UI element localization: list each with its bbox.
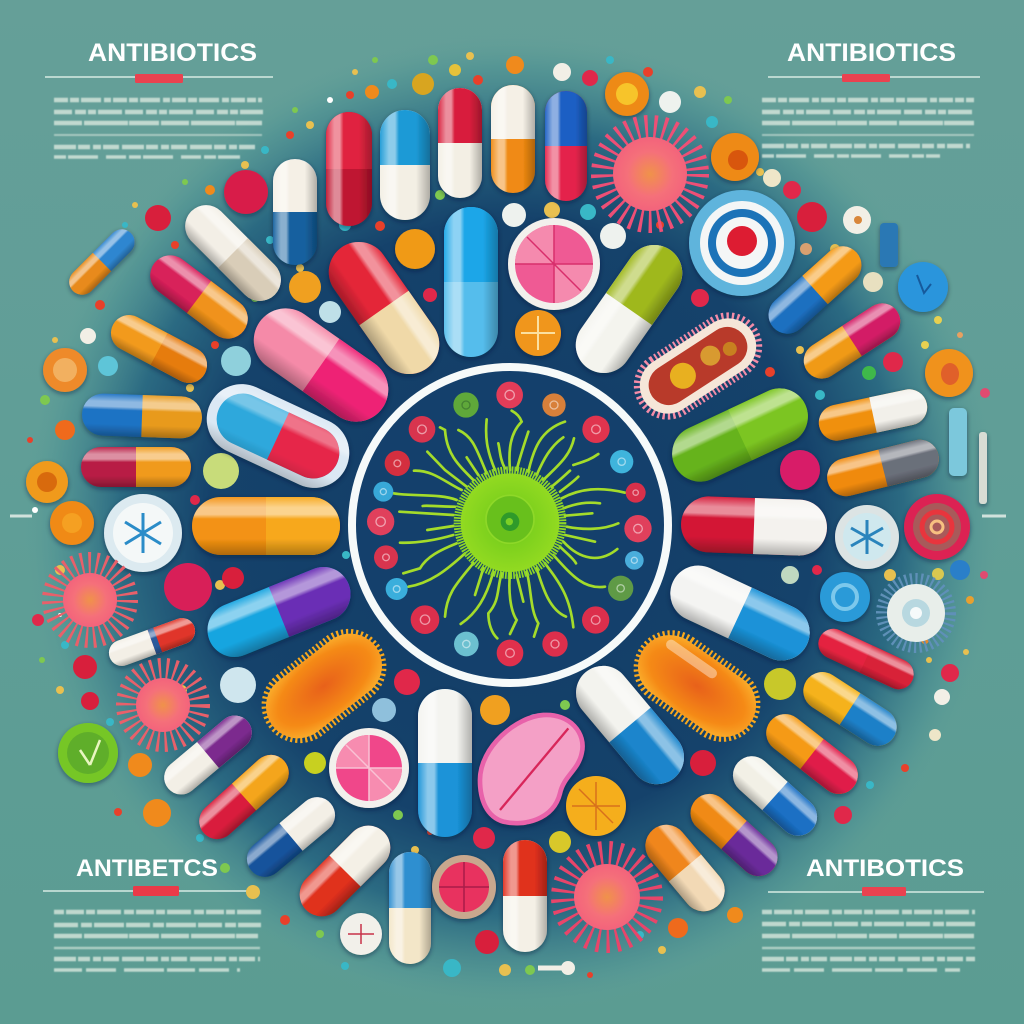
tablet: red rings xyxy=(904,494,970,560)
heading block: bottom left xyxy=(43,855,261,970)
heading block: top left xyxy=(45,39,273,157)
tablet: orange cross xyxy=(515,310,561,356)
bacteria xyxy=(53,127,948,941)
tablet: pink wheel lower left xyxy=(329,728,409,808)
capsule: small white and red xyxy=(105,614,199,670)
capsule: white and purple lower left xyxy=(157,709,259,801)
capsule: red top row xyxy=(326,112,372,226)
bacterium: pink starburst bottom xyxy=(563,853,651,941)
capsule: red small right xyxy=(813,624,919,694)
tablet: beige and pink bottom xyxy=(432,855,496,919)
tablet: white with blue cross left xyxy=(104,494,182,572)
tablet: orange left edge upper xyxy=(43,348,87,392)
capsule: orange and magenta xyxy=(797,296,907,386)
capsule: red and yellow lower left xyxy=(192,747,296,847)
tablet: green lower left xyxy=(58,723,118,783)
target-shaped tablet xyxy=(689,190,795,296)
capsule: framed blue and red xyxy=(195,373,361,499)
capsule: yellow and blue xyxy=(796,665,904,753)
capsule: blue and white xyxy=(380,110,430,220)
capsule: blue and orange xyxy=(81,393,203,439)
capsule: red and orange xyxy=(81,447,191,487)
capsule: red and white bottom xyxy=(503,840,547,952)
capsule: red and white lower left xyxy=(291,817,399,925)
capsule: dark blue and white lower left xyxy=(240,790,342,884)
title: bottom right: ANTIBOTICS xyxy=(806,855,964,882)
tablet: orange left edge lower xyxy=(50,501,94,545)
heading block: bottom right xyxy=(762,855,984,970)
capsule: blue and orange right xyxy=(761,238,869,342)
capsule: green xyxy=(663,379,817,491)
tablet: pink blob xyxy=(480,715,583,823)
capsule: magenta and orange xyxy=(142,247,256,347)
bacterium illustration, drawn in a 3x local grid xyxy=(367,382,652,666)
tablet: pink wheel upper centre xyxy=(508,218,600,310)
white ring with navy disc xyxy=(352,367,668,683)
capsule: white and blue bottom centre xyxy=(418,689,472,837)
capsule: red and white right xyxy=(680,495,828,557)
illegible text lines: bottom right xyxy=(762,912,975,970)
tablet: yellow-orange cross xyxy=(566,776,626,836)
tablet: magenta right xyxy=(780,450,820,490)
capsule: white and orange xyxy=(491,85,535,193)
capsule: small orange and blue xyxy=(64,224,140,300)
capsule: white and blue lower centre xyxy=(565,655,695,795)
capsule: large pink xyxy=(241,296,401,434)
capsule: orange and red xyxy=(759,706,865,802)
tablet: white with red cross xyxy=(340,913,382,955)
capsule: white and dark blue xyxy=(273,159,317,265)
flagella xyxy=(393,411,625,638)
vial: white right edge xyxy=(979,432,987,504)
rule with red bar: top right xyxy=(768,74,980,82)
title: top right: ANTIBIOTICS xyxy=(787,39,956,67)
tablet: blue dotted right xyxy=(820,572,870,622)
title: top left: ANTIBIOTICS xyxy=(88,39,257,67)
capsule: large red and cream xyxy=(317,230,451,386)
capsule: orange and yellow xyxy=(192,497,340,555)
capsule: white and blue right xyxy=(661,556,819,670)
tablet: white with blue star right xyxy=(835,505,899,569)
central bacterium panel xyxy=(352,367,668,683)
vial: light blue right edge xyxy=(949,408,967,476)
bacterium: pink starburst top xyxy=(603,127,697,221)
capsule: white and beige xyxy=(176,196,290,310)
capsule: large light blue xyxy=(444,207,498,357)
rule with red bar: bottom right xyxy=(768,887,984,896)
illegible text lines: top right xyxy=(762,100,975,156)
title: bottom left: ANTIBETCS xyxy=(76,855,218,882)
bacterium: pink rod xyxy=(629,308,767,424)
illegible text lines: bottom left xyxy=(54,912,261,970)
capsule: orange and cream xyxy=(637,816,733,920)
capsules xyxy=(64,85,987,964)
illegible text lines: top left xyxy=(54,100,263,157)
tablet: blue upper right xyxy=(898,262,948,312)
surrounding microbes xyxy=(367,382,652,666)
green cell body xyxy=(459,472,561,573)
bacterium: orange rod left xyxy=(253,621,395,751)
capsule: white and olive green xyxy=(565,234,693,384)
tablet: orange upper right xyxy=(925,349,973,397)
bacterium: pink starburst lower left xyxy=(127,669,199,741)
tablet: orange left edge xyxy=(26,461,68,503)
microbe markings xyxy=(376,390,642,657)
tablet: crimson upper left xyxy=(224,170,268,214)
vial: small blue xyxy=(880,223,898,267)
bacterium: orange rod right xyxy=(625,623,769,749)
tablets xyxy=(26,72,973,955)
capsule: orange xyxy=(105,309,213,389)
capsule: red and white xyxy=(438,88,482,198)
capsule: orange and white xyxy=(815,386,931,444)
capsule: blue and cream bottom xyxy=(389,852,431,964)
heading block: top right xyxy=(762,39,980,156)
bacterium: white and blue starburst right xyxy=(884,581,948,645)
capsule: blue and red xyxy=(545,91,587,201)
bacterium: orange starburst left xyxy=(53,563,127,637)
capsule: orange and grey xyxy=(823,436,943,500)
rule with red bar: top left xyxy=(45,74,273,83)
capsule: blue and purple xyxy=(199,559,359,665)
tablet: orange top xyxy=(605,72,649,116)
rule with red bar: bottom left xyxy=(43,886,248,896)
capsule: orange and purple xyxy=(683,786,785,884)
tablet: orange top right xyxy=(711,133,759,181)
tablet: orange upper centre xyxy=(395,229,435,269)
capsule: white and blue lower right xyxy=(725,748,825,844)
